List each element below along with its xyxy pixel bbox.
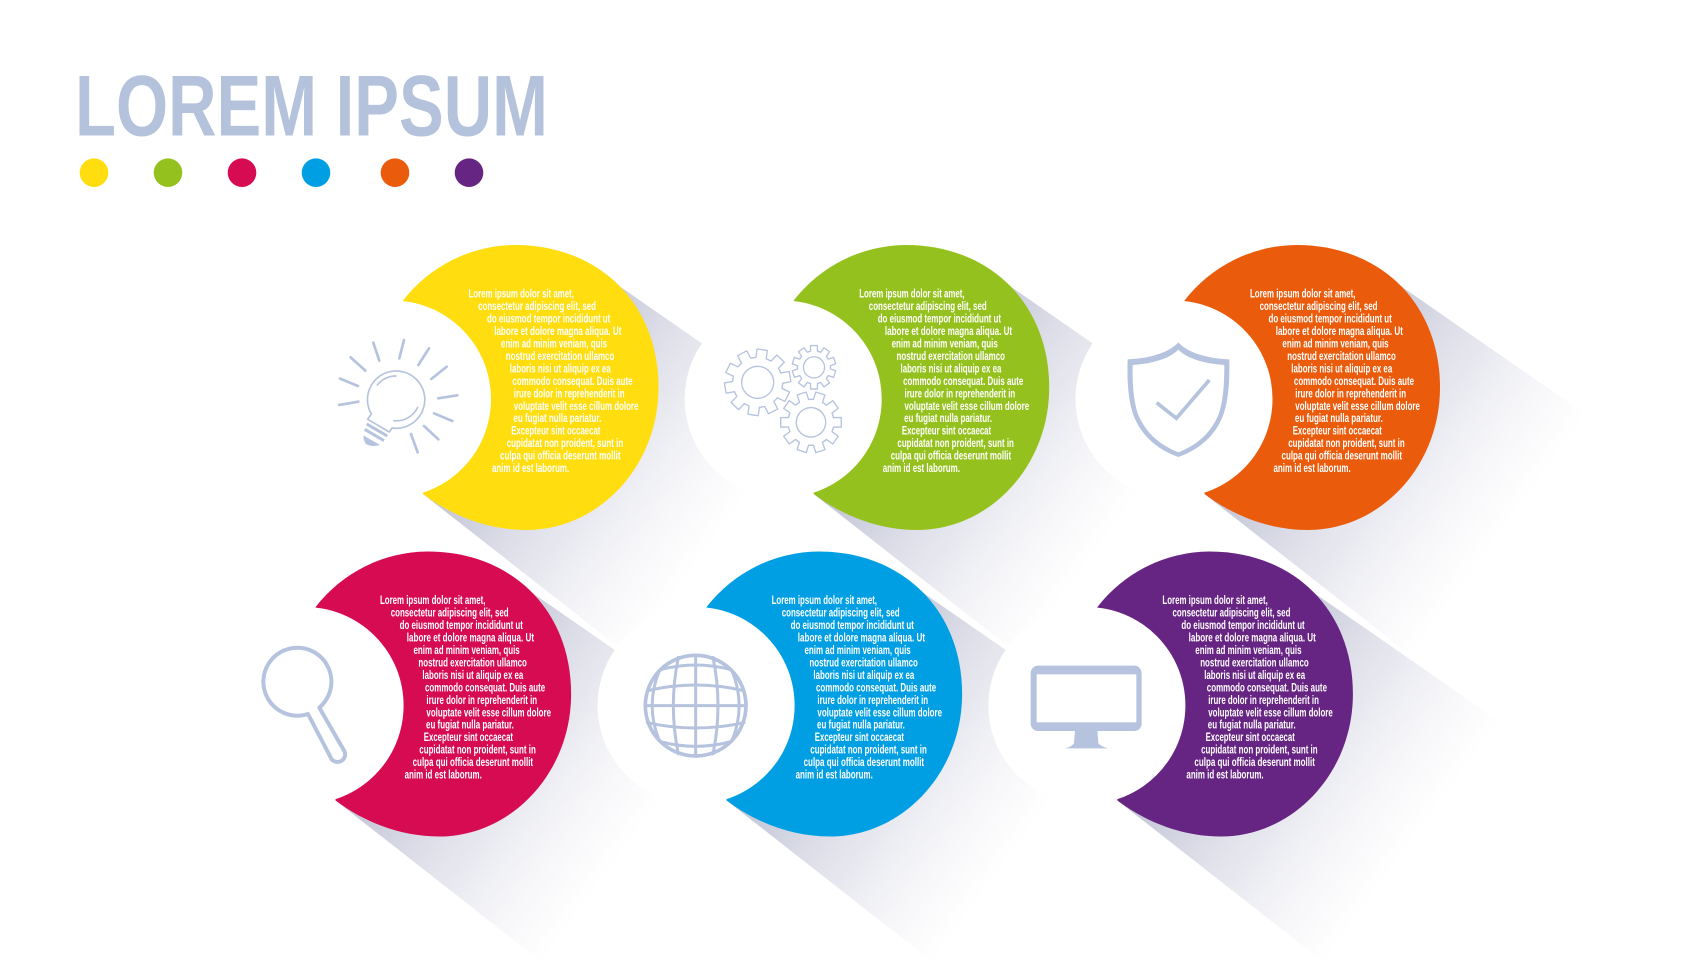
text block: irure dolor in reprehenderit in	[514, 388, 625, 400]
text block: nostrud exercitation ullamco	[1287, 351, 1396, 363]
text block: commodo consequat. Duis aute	[816, 682, 936, 694]
text block	[1162, 595, 1333, 782]
text block	[859, 289, 1029, 475]
text block: laboris nisi ut aliquip ex ea	[813, 670, 915, 682]
text block: Lorem ipsum dolor sit amet,	[468, 289, 574, 301]
icon: monitor	[1031, 666, 1142, 748]
text block: voluptate velit esse cillum dolore	[514, 401, 638, 413]
text block: voluptate velit esse cillum dolore	[817, 707, 942, 719]
text block: Excepteur sint occaecat	[815, 732, 904, 744]
text block: Excepteur sint occaecat	[1293, 426, 1382, 438]
text block: do eiusmod tempor incididunt ut	[878, 314, 1001, 326]
text block: culpa qui officia deserunt mollit	[891, 451, 1011, 463]
text block: nostrud exercitation ullamco	[897, 351, 1005, 363]
text block: cupidatat non proident, sunt in	[810, 745, 927, 757]
icon: globe	[645, 655, 746, 756]
text block: culpa qui officia deserunt mollit	[804, 757, 924, 769]
text block: Lorem ipsum dolor sit amet,	[1162, 595, 1268, 607]
text block: consectetur adipiscing elit, sed	[869, 301, 987, 313]
text block: consectetur adipiscing elit, sed	[1260, 301, 1378, 313]
text block: consectetur adipiscing elit, sed	[478, 301, 596, 313]
text block: anim id est laborum.	[405, 770, 482, 782]
panel: green settings	[685, 245, 1049, 530]
text block: laboris nisi ut aliquip ex ea	[1291, 363, 1393, 375]
text block: enim ad minim veniam, quis	[501, 338, 607, 350]
text block: enim ad minim veniam, quis	[1195, 645, 1302, 657]
text block: irure dolor in reprehenderit in	[1295, 388, 1406, 400]
text block: eu fugiat nulla pariatur.	[904, 413, 992, 425]
icon: magnifying glass	[263, 648, 345, 762]
text block: voluptate velit esse cillum dolore	[905, 401, 1029, 413]
text block: labore et dolore magna aliqua. Ut	[885, 326, 1012, 338]
panel: orange security	[1076, 245, 1440, 530]
text block: commodo consequat. Duis aute	[1294, 376, 1414, 388]
text block: consectetur adipiscing elit, sed	[782, 608, 900, 620]
text block: nostrud exercitation ullamco	[418, 657, 527, 669]
long shadows	[336, 282, 1587, 963]
text block: enim ad minim veniam, quis	[1282, 338, 1389, 350]
text block: do eiusmod tempor incididunt ut	[791, 620, 914, 632]
icon: shield with check	[1127, 342, 1229, 457]
text block: Excepteur sint occaecat	[424, 732, 513, 744]
text block: eu fugiat nulla pariatur.	[817, 720, 905, 732]
text block: nostrud exercitation ullamco	[1200, 657, 1309, 669]
text block: irure dolor in reprehenderit in	[817, 695, 928, 707]
text block: laboris nisi ut aliquip ex ea	[1204, 670, 1306, 682]
text block: eu fugiat nulla pariatur.	[513, 413, 601, 425]
text block: irure dolor in reprehenderit in	[905, 388, 1015, 400]
text block: anim id est laborum.	[1274, 463, 1351, 475]
text block: Lorem ipsum dolor sit amet,	[1250, 289, 1355, 301]
text block: commodo consequat. Duis aute	[425, 682, 545, 694]
panel: red search	[207, 552, 571, 836]
text block: labore et dolore magna aliqua. Ut	[1276, 326, 1403, 338]
text block: enim ad minim veniam, quis	[414, 645, 520, 657]
text block: labore et dolore magna aliqua. Ut	[407, 633, 534, 645]
text block: laboris nisi ut aliquip ex ea	[422, 670, 524, 682]
text block: Lorem ipsum dolor sit amet,	[380, 595, 485, 607]
text block: commodo consequat. Duis aute	[512, 376, 633, 388]
text block: labore et dolore magna aliqua. Ut	[798, 633, 925, 645]
text block: anim id est laborum.	[1186, 770, 1264, 782]
text block: labore et dolore magna aliqua. Ut	[1189, 633, 1316, 645]
text block: Excepteur sint occaecat	[511, 426, 601, 438]
text block: nostrud exercitation ullamco	[809, 657, 918, 669]
text block: enim ad minim veniam, quis	[804, 645, 911, 657]
text block	[772, 595, 942, 782]
text block: anim id est laborum.	[492, 463, 569, 475]
text block: nostrud exercitation ullamco	[506, 351, 614, 363]
text block: Lorem ipsum dolor sit amet,	[859, 289, 965, 301]
text block: culpa qui officia deserunt mollit	[500, 451, 621, 463]
text block: do eiusmod tempor incididunt ut	[400, 620, 523, 632]
text block: voluptate velit esse cillum dolore	[1208, 707, 1333, 719]
text block: cupidatat non proident, sunt in	[897, 438, 1014, 450]
text block: culpa qui officia deserunt mollit	[413, 757, 533, 769]
icon: gears	[720, 345, 850, 461]
text block: labore et dolore magna aliqua. Ut	[494, 326, 622, 338]
title: LOREM IPSUM	[75, 58, 548, 154]
text block: do eiusmod tempor incididunt ut	[487, 314, 610, 326]
text block: do eiusmod tempor incididunt ut	[1268, 314, 1392, 326]
text block: enim ad minim veniam, quis	[892, 338, 998, 350]
text block: culpa qui officia deserunt mollit	[1282, 451, 1402, 463]
text block: irure dolor in reprehenderit in	[426, 695, 537, 707]
text block: commodo consequat. Duis aute	[903, 376, 1023, 388]
legend dots	[80, 158, 483, 187]
panel: yellow idea	[294, 245, 658, 530]
text block: cupidatat non proident, sunt in	[507, 438, 623, 450]
text block	[1250, 289, 1420, 475]
text block: cupidatat non proident, sunt in	[419, 745, 536, 757]
text block: do eiusmod tempor incididunt ut	[1181, 620, 1305, 632]
text block: voluptate velit esse cillum dolore	[426, 707, 551, 719]
text block: consectetur adipiscing elit, sed	[1173, 608, 1290, 620]
panel: purple monitor	[988, 552, 1353, 836]
text block: Excepteur sint occaecat	[902, 426, 991, 438]
text block: voluptate velit esse cillum dolore	[1295, 401, 1420, 413]
text block: anim id est laborum.	[796, 770, 873, 782]
text block: irure dolor in reprehenderit in	[1208, 695, 1319, 707]
text block: anim id est laborum.	[883, 463, 960, 475]
icon: light bulb	[339, 340, 457, 452]
text block: consectetur adipiscing elit, sed	[391, 608, 509, 620]
text block: eu fugiat nulla pariatur.	[426, 720, 514, 732]
panel: blue globe	[598, 552, 962, 836]
text block: Excepteur sint occaecat	[1206, 732, 1295, 744]
text block: commodo consequat. Duis aute	[1207, 682, 1327, 694]
text block: Lorem ipsum dolor sit amet,	[772, 595, 877, 607]
text block: eu fugiat nulla pariatur.	[1208, 720, 1296, 732]
text block: cupidatat non proident, sunt in	[1288, 438, 1405, 450]
text block: laboris nisi ut aliquip ex ea	[510, 363, 611, 375]
text block: culpa qui officia deserunt mollit	[1194, 757, 1315, 769]
text block: laboris nisi ut aliquip ex ea	[901, 363, 1002, 375]
text block: eu fugiat nulla pariatur.	[1295, 413, 1383, 425]
text block	[468, 289, 638, 475]
text block: cupidatat non proident, sunt in	[1201, 745, 1318, 757]
text block	[380, 595, 551, 782]
